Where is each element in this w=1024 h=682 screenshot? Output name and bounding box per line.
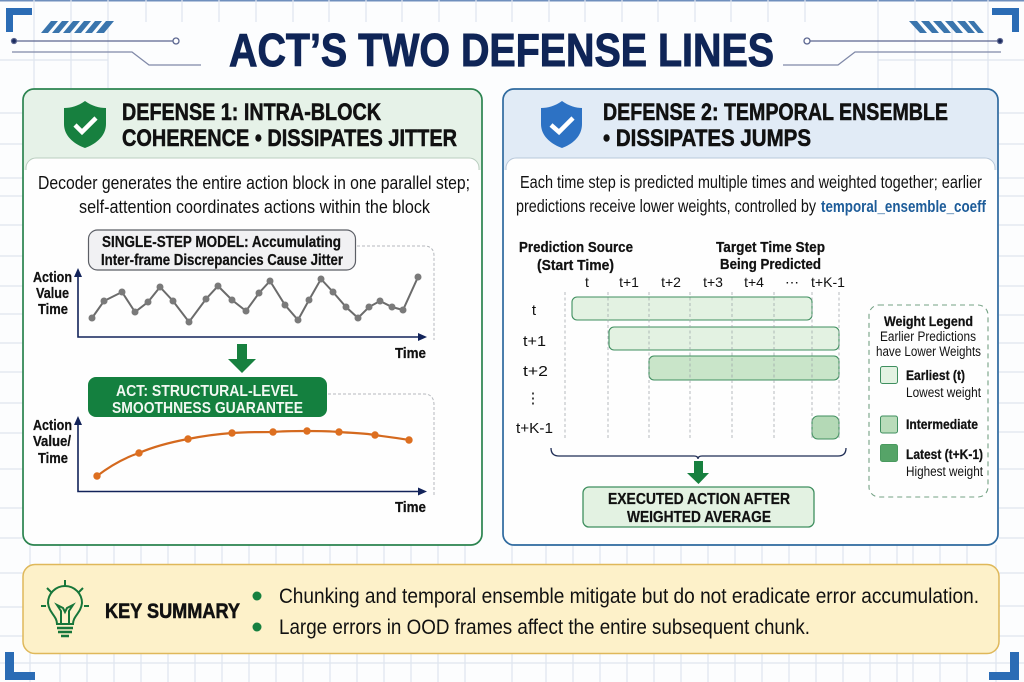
chart: ACT smooth line: Time — [395, 500, 426, 516]
column and row headers: t+4 — [744, 274, 764, 290]
column and row headers: Target Time Step — [716, 239, 825, 256]
prediction bars — [572, 297, 839, 439]
icon: green shield with check — [64, 101, 106, 148]
decoration: right circuit lines — [783, 38, 1002, 65]
heading: defense 1: COHERENCE • DISSIPATES JITTER — [122, 125, 457, 152]
chart: ACT smooth line: Value/ — [33, 434, 71, 450]
brace — [551, 448, 846, 459]
text: defense 1 description: Decoder generates the entire action block in one parallel step; — [38, 173, 470, 193]
chart: temporal ensemble prediction grid — [516, 239, 846, 527]
chart: ACT smooth line: Time — [38, 451, 68, 467]
decoration: right hatch stripes — [909, 21, 984, 33]
column and row headers: t — [585, 274, 589, 290]
column and row headers: ⋮ — [526, 390, 540, 407]
panel: defense 2 — [503, 89, 998, 545]
panel: key summary — [23, 564, 999, 654]
column and row headers: t — [532, 302, 537, 319]
legend: weights: Earlier Predictions — [880, 329, 976, 344]
panel: defense 1 — [23, 89, 482, 545]
chart: single-step jitter line: Value — [36, 286, 69, 302]
column and row headers: ⋯ — [785, 274, 799, 290]
legend: weights: Earliest (t) — [906, 368, 965, 383]
column and row headers: Prediction Source — [519, 239, 633, 256]
column and row headers — [516, 239, 845, 437]
column and row headers: Being Predicted — [720, 256, 821, 273]
bullet list — [252, 585, 979, 639]
legend: weights: Intermediate — [906, 417, 978, 432]
chart: single-step jitter line — [33, 246, 434, 362]
title: ACT’S TWO DEFENSE LINES — [229, 24, 774, 76]
text: defense 2 description: temporal_ensemble_coeff — [821, 198, 986, 216]
column and row headers: (Start Time) — [537, 257, 614, 274]
heading: defense 2: DEFENSE 2: TEMPORAL ENSEMBLE — [603, 99, 948, 126]
decoration: top-left corner bracket — [6, 8, 32, 32]
legend: weights: Weight Legend — [884, 313, 973, 329]
chart: single-step jitter line: Action — [33, 270, 72, 286]
icon: blue shield with check — [541, 101, 582, 148]
callout: ACT smoothness: SMOOTHNESS GUARANTEE — [112, 400, 303, 417]
column and row headers: t+1 — [619, 274, 639, 290]
heading: defense 2: • DISSIPATES JUMPS — [603, 125, 811, 152]
text: defense 1 description — [38, 173, 470, 217]
heading: defense 2 — [603, 99, 948, 152]
legend: weights: Latest (t+K-1) — [906, 447, 983, 462]
decoration: left circuit lines — [12, 38, 201, 65]
decoration: top-right corner bracket — [992, 8, 1019, 32]
legend: weights: have Lower Weights — [876, 344, 981, 359]
label: key summary: KEY SUMMARY — [105, 600, 240, 623]
callout: single-step model: SINGLE-STEP MODEL: Accumulating — [102, 234, 341, 251]
heading: defense 1: DEFENSE 1: INTRA-BLOCK — [122, 99, 382, 126]
text: defense 2 description: predictions receive lower weights, controlled by — [516, 196, 816, 216]
column and row headers: t+K-1 — [811, 274, 845, 290]
arrow: down to executed action — [687, 461, 709, 484]
chart: single-step jitter line: Time — [38, 302, 68, 318]
chart: single-step jitter line: Time — [395, 346, 426, 362]
decoration: bottom-left corner bracket — [5, 652, 35, 680]
arrow: down to ACT — [228, 344, 256, 373]
box: executed action: EXECUTED ACTION AFTER — [608, 491, 790, 508]
column and row headers: t+2 — [523, 363, 548, 380]
text: defense 2 description — [516, 172, 986, 216]
callout: single-step model — [88, 230, 356, 270]
decoration: left hatch stripes — [41, 21, 114, 33]
icon: light bulb — [41, 580, 89, 636]
callout: ACT smoothness — [88, 377, 327, 417]
legend: weights — [869, 305, 988, 497]
decoration: bottom-right corner bracket — [989, 652, 1019, 680]
callout: ACT smoothness: ACT: STRUCTURAL-LEVEL — [116, 383, 298, 400]
text: defense 1 description: self-attention coordinates actions within the block — [79, 197, 431, 217]
box: executed action: WEIGHTED AVERAGE — [627, 509, 771, 526]
chart: ACT smooth line: Action — [33, 418, 72, 434]
heading: defense 1 — [122, 99, 457, 152]
column and row headers: t+1 — [523, 333, 546, 350]
chart: ACT smooth line — [33, 394, 434, 516]
legend: weights: Highest weight — [906, 464, 983, 479]
bullet list: Large errors in OOD frames affect the entire subsequent chunk. — [279, 616, 810, 639]
legend: weights: Lowest weight — [906, 385, 981, 400]
box: executed action — [583, 487, 814, 527]
column and row headers: t+3 — [703, 274, 723, 290]
column and row headers: t+2 — [661, 274, 681, 290]
column and row headers: t+K-1 — [516, 420, 553, 437]
callout: single-step model: Inter-frame Discrepancies Cause Jitter — [101, 252, 343, 269]
